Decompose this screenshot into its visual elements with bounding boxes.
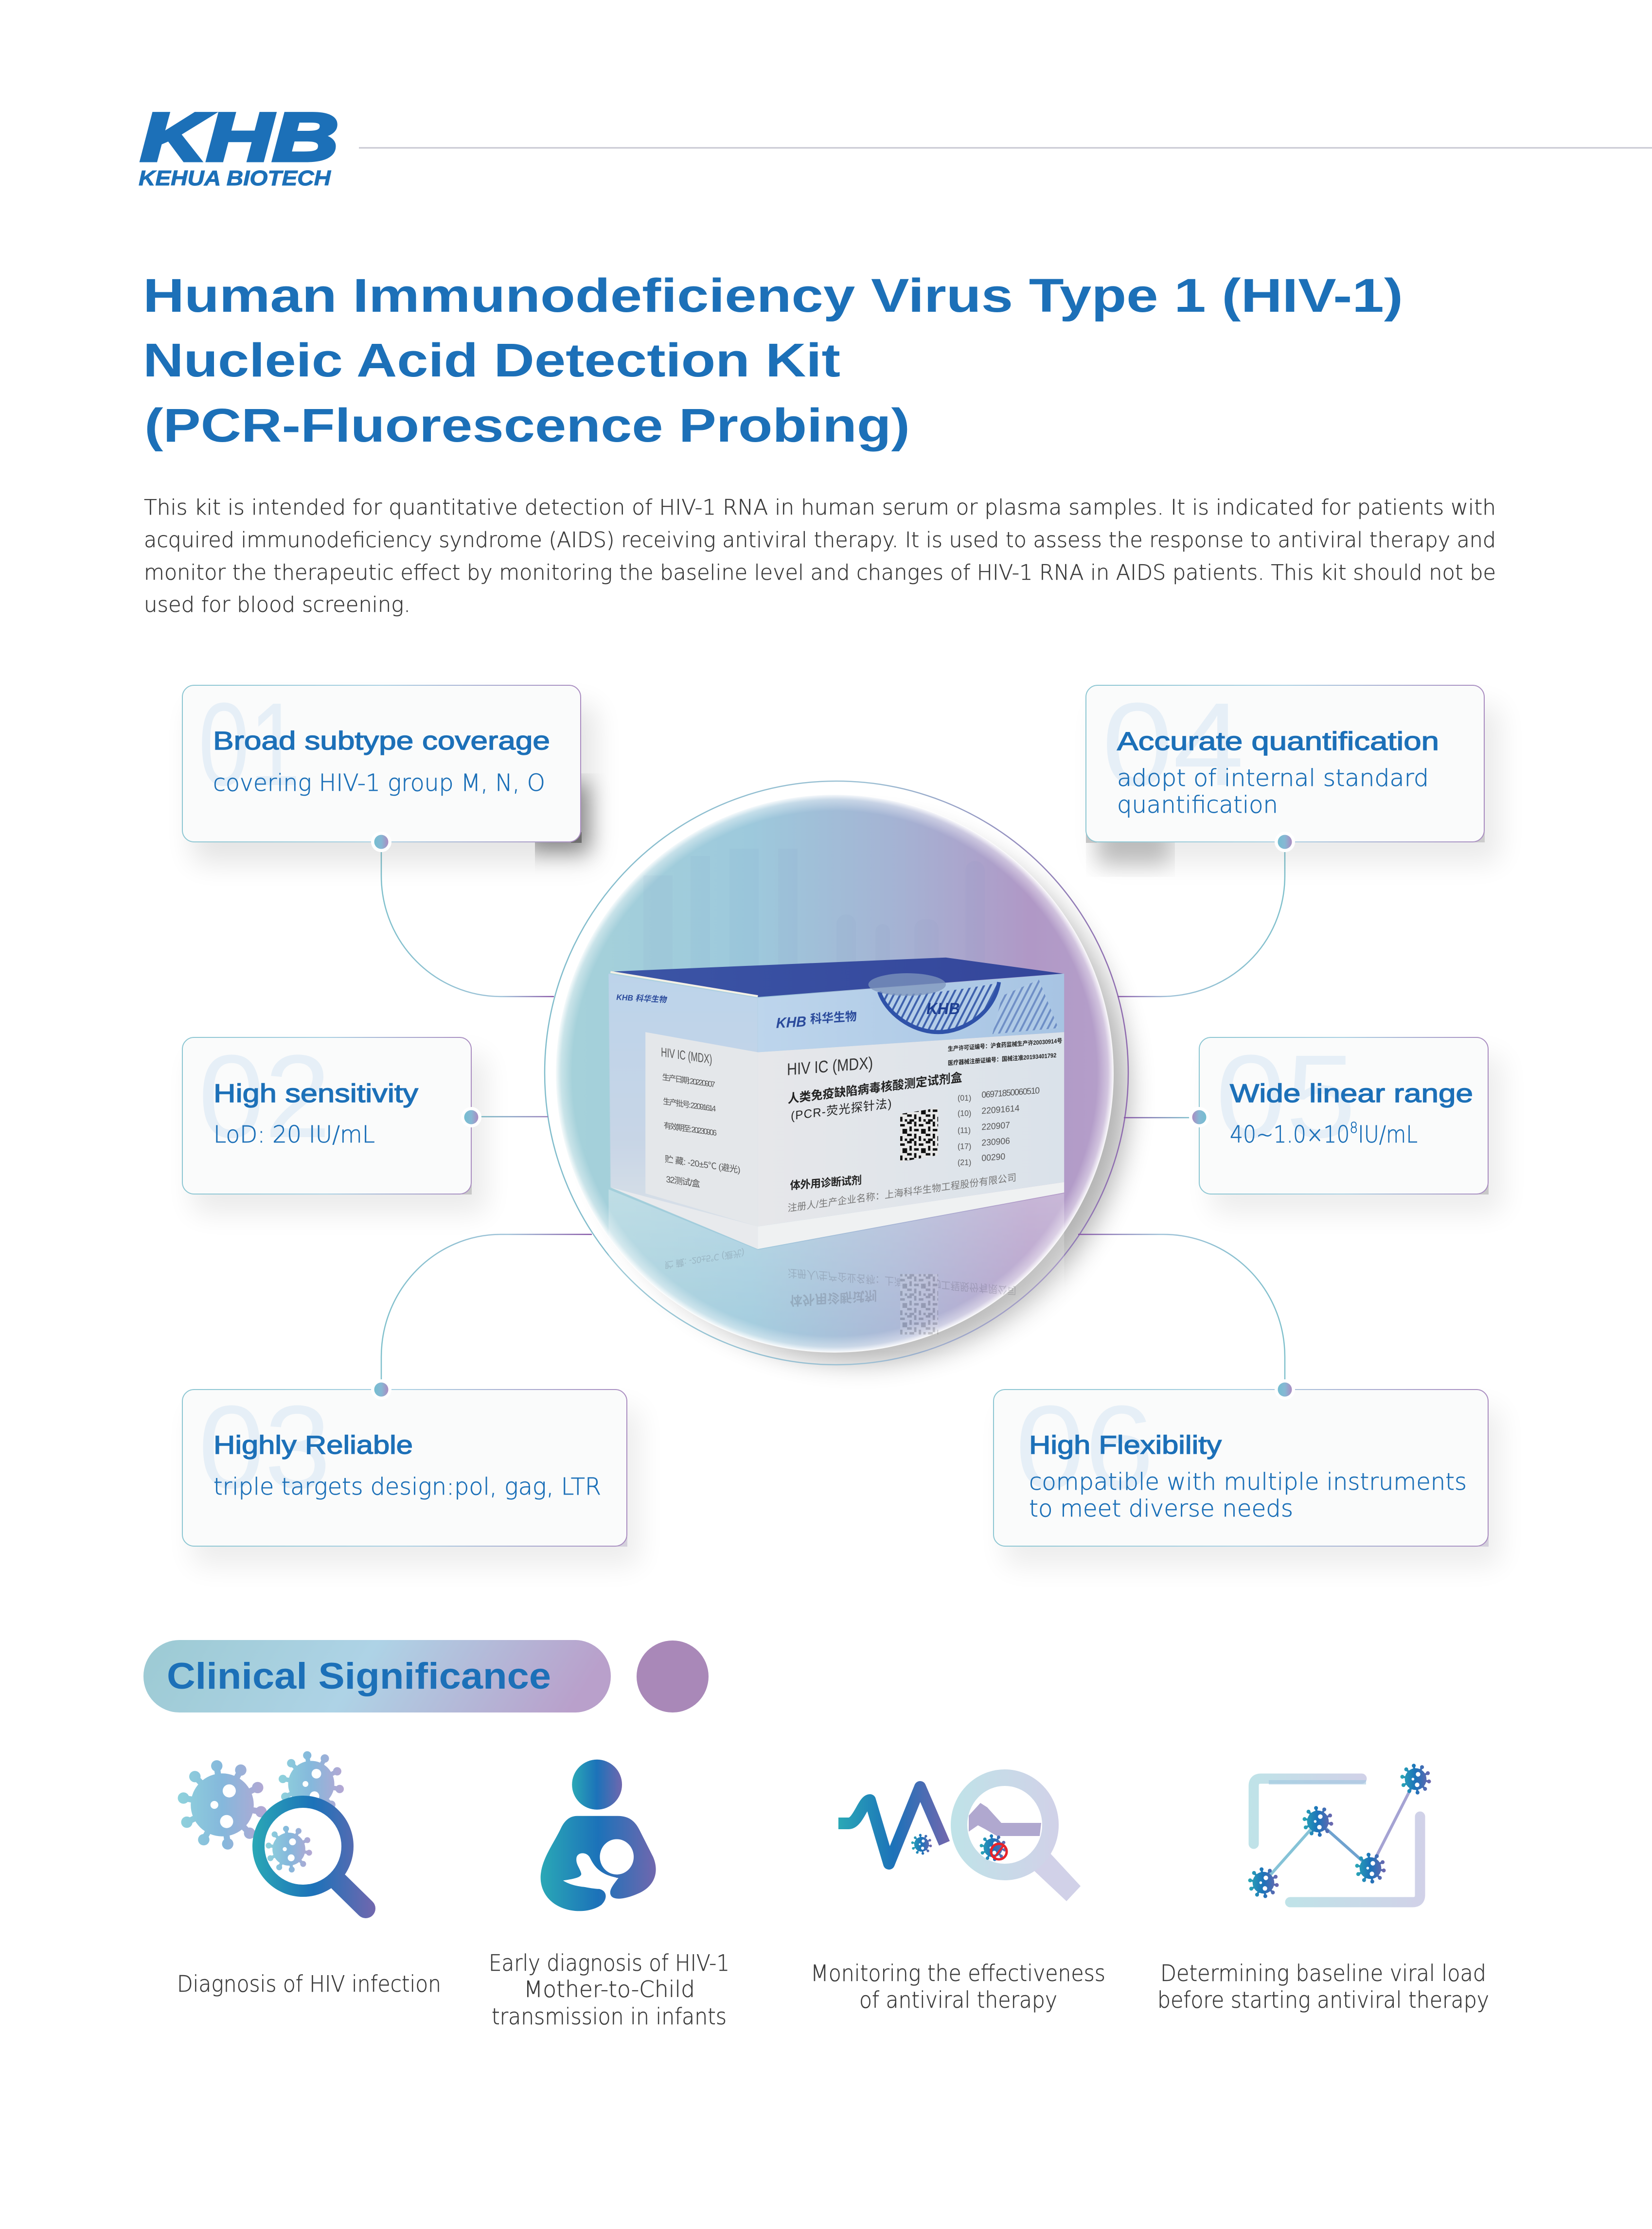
icon: viral load chart — [1248, 1764, 1431, 1902]
chart nodes — [1248, 1867, 1279, 1898]
box front text: (11) — [958, 1126, 971, 1135]
box left text: KHB 科华生物 — [616, 993, 668, 1004]
box left text: HIV IC (MDX) — [661, 1044, 712, 1067]
box front text: KHB — [776, 1013, 806, 1032]
disc shadow — [588, 822, 1128, 1362]
description: 40~1.0×10 — [1230, 1121, 1366, 1148]
label: baseline viral load: Determining baseline viral load — [1160, 1960, 1486, 1986]
icon: monitoring wave and magnifier — [838, 1778, 1081, 1901]
ghost bars behind box — [643, 849, 985, 975]
box front text: (01) — [958, 1094, 971, 1103]
connector: card 1 to disc — [381, 852, 554, 997]
ghost number: 02 — [198, 1031, 331, 1162]
disc gradient fill — [556, 795, 1113, 1352]
panel: card 06 high flexibility — [994, 1379, 1500, 1566]
box front text: (PCR-荧光探针法) — [791, 1097, 891, 1123]
logo: KHB Kehua Biotech: KEHUA BIOTECH — [139, 166, 331, 190]
icon: virus under magnifier — [178, 1751, 366, 1908]
ghost number: 03 — [198, 1381, 331, 1513]
box top flap — [610, 958, 1063, 997]
heading: High sensitivity — [213, 1079, 419, 1108]
central product disc — [545, 781, 1128, 1365]
box seal: KHB — [925, 999, 961, 1017]
intro paragraph: acquired immunodeficiency syndrome (AIDS) receiving antiviral therapy. It is used to assess the response to antiviral therapy and — [144, 528, 1496, 553]
intro paragraph: This kit is intended for quantitative detection of HIV-1 RNA in human serum or plasma samples. It is indicated for patients with — [144, 495, 1496, 520]
reflection: 体外用诊断试剂 — [790, 1288, 877, 1308]
heading: Highly Reliable — [213, 1431, 413, 1460]
intro paragraph: used for blood screening. — [144, 592, 410, 617]
panel: card 02 high sensitivity — [182, 1031, 486, 1213]
box left text: 32测试/盒 — [666, 1174, 700, 1189]
product box — [608, 958, 1064, 1351]
box front text: (21) — [958, 1158, 971, 1167]
frame top-left — [1254, 1779, 1362, 1844]
box bottom edge — [758, 1182, 1064, 1249]
description: quantification — [1117, 791, 1278, 819]
box front text: 220907 — [981, 1120, 1010, 1132]
box front text: 人类免疫缺陷病毒核酸测定试剂盒 — [788, 1070, 962, 1106]
box seal — [869, 973, 1058, 1034]
intro paragraph — [144, 495, 1496, 617]
box front text: (10) — [958, 1109, 971, 1118]
ghost number: 01 — [198, 678, 301, 810]
small virus — [911, 1834, 932, 1855]
node dot — [371, 832, 391, 852]
panel: card 01 broad subtype coverage — [182, 678, 596, 863]
description: LoD: 20 IU/mL — [213, 1121, 375, 1148]
node dot — [1275, 1379, 1295, 1400]
logo: KHB Kehua Biotech — [139, 99, 338, 190]
connector: card 6 to disc — [1078, 1234, 1285, 1379]
description — [1029, 1468, 1467, 1522]
reflection: 贮 藏: -20±5℃ (避光) — [665, 1248, 745, 1270]
box front text: 00290 — [981, 1151, 1005, 1163]
box left text: 贮 藏: -20±5℃ (避光) — [665, 1154, 741, 1175]
title — [143, 269, 1403, 452]
connector: card 3 to disc — [381, 1234, 592, 1379]
icon: mother and child — [541, 1760, 656, 1911]
description: adopt of internal standard — [1117, 765, 1429, 792]
node dot — [1189, 1107, 1209, 1127]
description: to meet diverse needs — [1029, 1495, 1293, 1522]
label: early diagnosis: Early diagnosis of HIV-1 — [489, 1950, 729, 1976]
label: monitoring effectiveness: of antiviral therapy — [859, 1987, 1057, 2013]
pale magnifier handle — [1034, 1854, 1081, 1901]
ghost number: 05 — [1216, 1031, 1356, 1162]
box front text: 06971850060510 — [981, 1086, 1040, 1100]
box left text: 生产日期: 20220907 — [662, 1073, 715, 1089]
box front text: 注册人/生产企业名称：上海科华生物工程股份有限公司 — [788, 1172, 1016, 1214]
ghost number: 06 — [1015, 1381, 1154, 1513]
pale magnifier ring — [959, 1778, 1050, 1872]
node dot — [461, 1107, 481, 1127]
connector: card 2 to disc — [481, 1116, 548, 1117]
frame bottom-right — [1290, 1817, 1420, 1902]
reflection: 注册人/生产企业名称：上海科华生物工程股份有限公司 — [788, 1267, 1016, 1297]
reflection — [608, 1189, 1064, 1351]
heading: Accurate quantification — [1117, 727, 1439, 756]
heading: Wide linear range — [1230, 1079, 1473, 1108]
title: Nucleic Acid Detection Kit — [143, 334, 840, 387]
node dot — [371, 1379, 391, 1400]
panel: card 05 wide linear range — [1189, 1031, 1503, 1213]
box front text: HIV IC (MDX) — [787, 1053, 873, 1079]
label: early diagnosis — [489, 1950, 729, 2030]
label: baseline viral load: before starting antiviral therapy — [1157, 1987, 1489, 2013]
header rule — [359, 147, 1652, 149]
heading: High Flexibility — [1029, 1431, 1222, 1460]
chart lines — [1263, 1821, 1318, 1883]
wave in lens — [969, 1803, 1041, 1836]
section heading: clinical significance: Clinical Significance — [167, 1656, 551, 1697]
panel: card 04 accurate quantification — [1086, 678, 1500, 866]
description: triple targets design:pol, gag, LTR — [213, 1473, 601, 1500]
section accent circle — [637, 1641, 709, 1712]
description: IU/mL — [1358, 1121, 1418, 1148]
box left text: 有效期至: 20230906 — [664, 1121, 717, 1138]
description: 8 — [1350, 1120, 1358, 1137]
panel: card 03 highly reliable — [182, 1379, 639, 1566]
box QR code — [900, 1108, 938, 1162]
title: Human Immunodeficiency Virus Type 1 (HIV-1) — [143, 269, 1403, 322]
label: monitoring effectiveness: Monitoring the effectiveness — [811, 1960, 1105, 1986]
intro paragraph: monitor the therapeutic effect by monitoring the baseline level and changes of HIV-1 RNA in AIDS patients. This kit should not be — [144, 560, 1496, 585]
box front upper band — [758, 974, 1064, 1052]
title: (PCR-Fluorescence Probing) — [144, 399, 910, 452]
section heading: clinical significance — [143, 1640, 611, 1712]
box front text: 医疗器械注册证编号：国械注准20193401792 — [948, 1052, 1056, 1067]
box front text: 生产许可证编号：沪食药监械生产许20030914号 — [948, 1037, 1062, 1052]
magnified virus — [266, 1826, 312, 1872]
label: monitoring effectiveness — [811, 1960, 1105, 2013]
description — [1117, 765, 1429, 819]
upper virus — [279, 1751, 344, 1817]
node dot — [1275, 832, 1295, 852]
box front text — [776, 1010, 1062, 1214]
box left face — [608, 974, 758, 1249]
blocked virus — [980, 1834, 1007, 1861]
logo: KHB Kehua Biotech: KHB — [141, 99, 338, 175]
heading: Broad subtype coverage — [213, 727, 550, 755]
label: early diagnosis: transmission in infants — [492, 2003, 727, 2030]
large virus — [178, 1760, 266, 1850]
magnifier glass — [259, 1802, 347, 1890]
box front label — [758, 1032, 1064, 1227]
label: diagnosis of HIV infection: Diagnosis of HIV infection — [177, 1971, 441, 1997]
description: covering HIV-1 group M, N, O — [213, 769, 545, 797]
box front text: 22091614 — [981, 1103, 1019, 1116]
box front text: 体外用诊断试剂 — [790, 1174, 862, 1192]
wave — [838, 1787, 944, 1864]
label: early diagnosis: Mother-to-Child — [524, 1976, 695, 2002]
box left label — [645, 1032, 758, 1227]
ghost number: 04 — [1102, 678, 1244, 810]
box left text: 生产批号: 22091614 — [663, 1097, 716, 1114]
outer ring — [545, 781, 1128, 1365]
description: compatible with multiple instruments — [1029, 1468, 1467, 1496]
box front text: 230906 — [981, 1136, 1010, 1148]
connector: card 4 to disc — [1118, 852, 1285, 997]
box left text — [616, 993, 741, 1189]
box front text: 科华生物 — [810, 1010, 857, 1026]
label: baseline viral load — [1157, 1960, 1489, 2013]
connector: card 5 to disc — [1124, 1117, 1190, 1118]
box front text: (17) — [958, 1142, 971, 1151]
magnifier handle — [339, 1882, 366, 1908]
